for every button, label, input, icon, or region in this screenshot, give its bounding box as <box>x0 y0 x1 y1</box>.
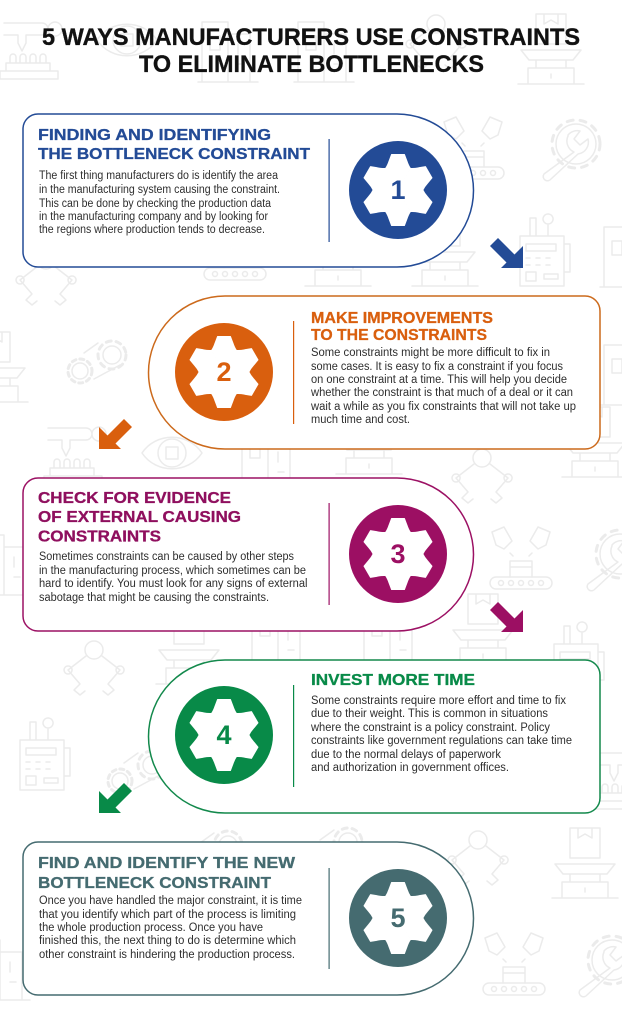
panel: step 1 <box>23 114 474 267</box>
body text 4: constraints like government regulations can take time <box>311 735 572 747</box>
body text 1: the regions where production tends to decrease. <box>39 224 265 236</box>
divider 5 <box>328 868 330 969</box>
icon: gear 4: 4 <box>216 720 232 750</box>
body text 3: sabotage that might be causing the constraints. <box>39 592 269 604</box>
icon: gear 5: 5 <box>390 903 406 933</box>
body text 2: much time and cost. <box>311 414 410 426</box>
body text 2 <box>310 347 576 426</box>
card outline 3 <box>23 478 474 631</box>
heading 1: FINDING AND IDENTIFYING <box>38 127 271 144</box>
heading 2: MAKE IMPROVEMENTS <box>311 310 493 327</box>
heading 4: INVEST MORE TIME <box>311 672 475 689</box>
body text 3: hard to identify. You must look for any signs of external <box>39 578 308 590</box>
body text 4 <box>310 695 572 774</box>
body text 4: where the constraint is a policy constraint. Policy <box>310 722 550 734</box>
body text 4: due to the normal delays of paperwork <box>311 749 501 761</box>
body text 4: and authorization in government offices. <box>311 762 509 774</box>
divider 2 <box>293 321 294 424</box>
body text 4: Some constraints require more effort and time to fix <box>311 695 566 707</box>
divider 1 <box>328 139 330 242</box>
icon: gear 3: 3 <box>390 539 406 569</box>
body text 5: finished this, the next thing to do is determine which <box>39 935 296 947</box>
card outline 4 <box>148 660 600 813</box>
heading 1: THE BOTTLENECK CONSTRAINT <box>38 146 310 163</box>
body text 5: Once you have handled the major constraint, it is time <box>39 895 302 907</box>
panel: step 3 <box>23 478 474 631</box>
card outline 5 <box>23 842 474 995</box>
body text 1 <box>39 170 280 236</box>
icon: gear 5 <box>349 869 447 967</box>
heading 5: BOTTLENECK CONSTRAINT <box>38 875 271 892</box>
body text 1: in the manufacturing system causing the constraint. <box>39 184 280 196</box>
card outline 2 <box>148 296 600 449</box>
body text 5: the whole production process. Once you have <box>39 922 263 934</box>
body text 2: on one constraint at a time. This will help you decide <box>311 374 567 386</box>
body text 3: in the manufacturing process, which sometimes can be <box>39 565 306 577</box>
body text 3: Sometimes constraints can be caused by other steps <box>39 551 294 563</box>
heading 3 <box>38 490 241 546</box>
card outline 1 <box>23 114 474 267</box>
heading 3: CHECK FOR EVIDENCE <box>38 490 231 507</box>
panel: step 2 <box>148 296 600 449</box>
body text 1: The first thing manufacturers do is identify the area <box>39 170 279 182</box>
body text 3 <box>39 551 308 604</box>
heading 3: CONSTRAINTS <box>38 528 161 546</box>
body text 2: whether the constraint is that much of a deal or it can <box>310 387 573 399</box>
body text 5 <box>39 895 302 961</box>
icon: gear 2 <box>175 323 273 421</box>
divider 3 <box>328 503 330 605</box>
icon: gear 4 <box>175 686 273 784</box>
heading 5: FIND AND IDENTIFY THE NEW <box>38 855 296 872</box>
icon: gear 3 <box>349 505 447 603</box>
icon: gear 2: 2 <box>216 357 232 387</box>
body text 4: due to their weight. This is common in situations <box>311 708 548 720</box>
heading 2: TO THE CONSTRAINTS <box>311 327 487 344</box>
heading 3: OF EXTERNAL CAUSING <box>38 509 241 526</box>
body text 2: some cases. It is easy to fix a constraint if you focus <box>311 361 563 373</box>
panel: step 5 <box>23 842 474 995</box>
body text 1: This can be done by checking the production data <box>39 198 272 210</box>
panel: step 4 <box>148 660 600 813</box>
title: 5 WAYS MANUFACTURERS USE CONSTRAINTS <box>42 24 580 51</box>
divider 4 <box>293 685 294 787</box>
icon: gear 1 <box>349 141 447 239</box>
title: TO ELIMINATE BOTTLENECKS <box>139 51 484 78</box>
body text 5: that you identify which part of the process is limiting <box>39 909 296 921</box>
arrow 1 <box>490 238 523 268</box>
heading 5 <box>38 855 296 892</box>
body text 1: in the manufacturing company and by looking for <box>39 211 268 223</box>
icon: gear 1: 1 <box>390 175 406 205</box>
arrow 4 <box>99 783 132 813</box>
arrow 2 <box>99 419 132 449</box>
body text 2: Some constraints might be more difficult to fix in <box>311 347 550 359</box>
title <box>42 24 580 78</box>
arrow 3 <box>490 602 523 632</box>
body text 5: other constraint is hindering the production process. <box>39 949 295 961</box>
body text 2: wait a while as you fix constraints that will not take up <box>310 401 576 413</box>
heading 2 <box>311 310 493 344</box>
heading 1 <box>38 127 310 163</box>
